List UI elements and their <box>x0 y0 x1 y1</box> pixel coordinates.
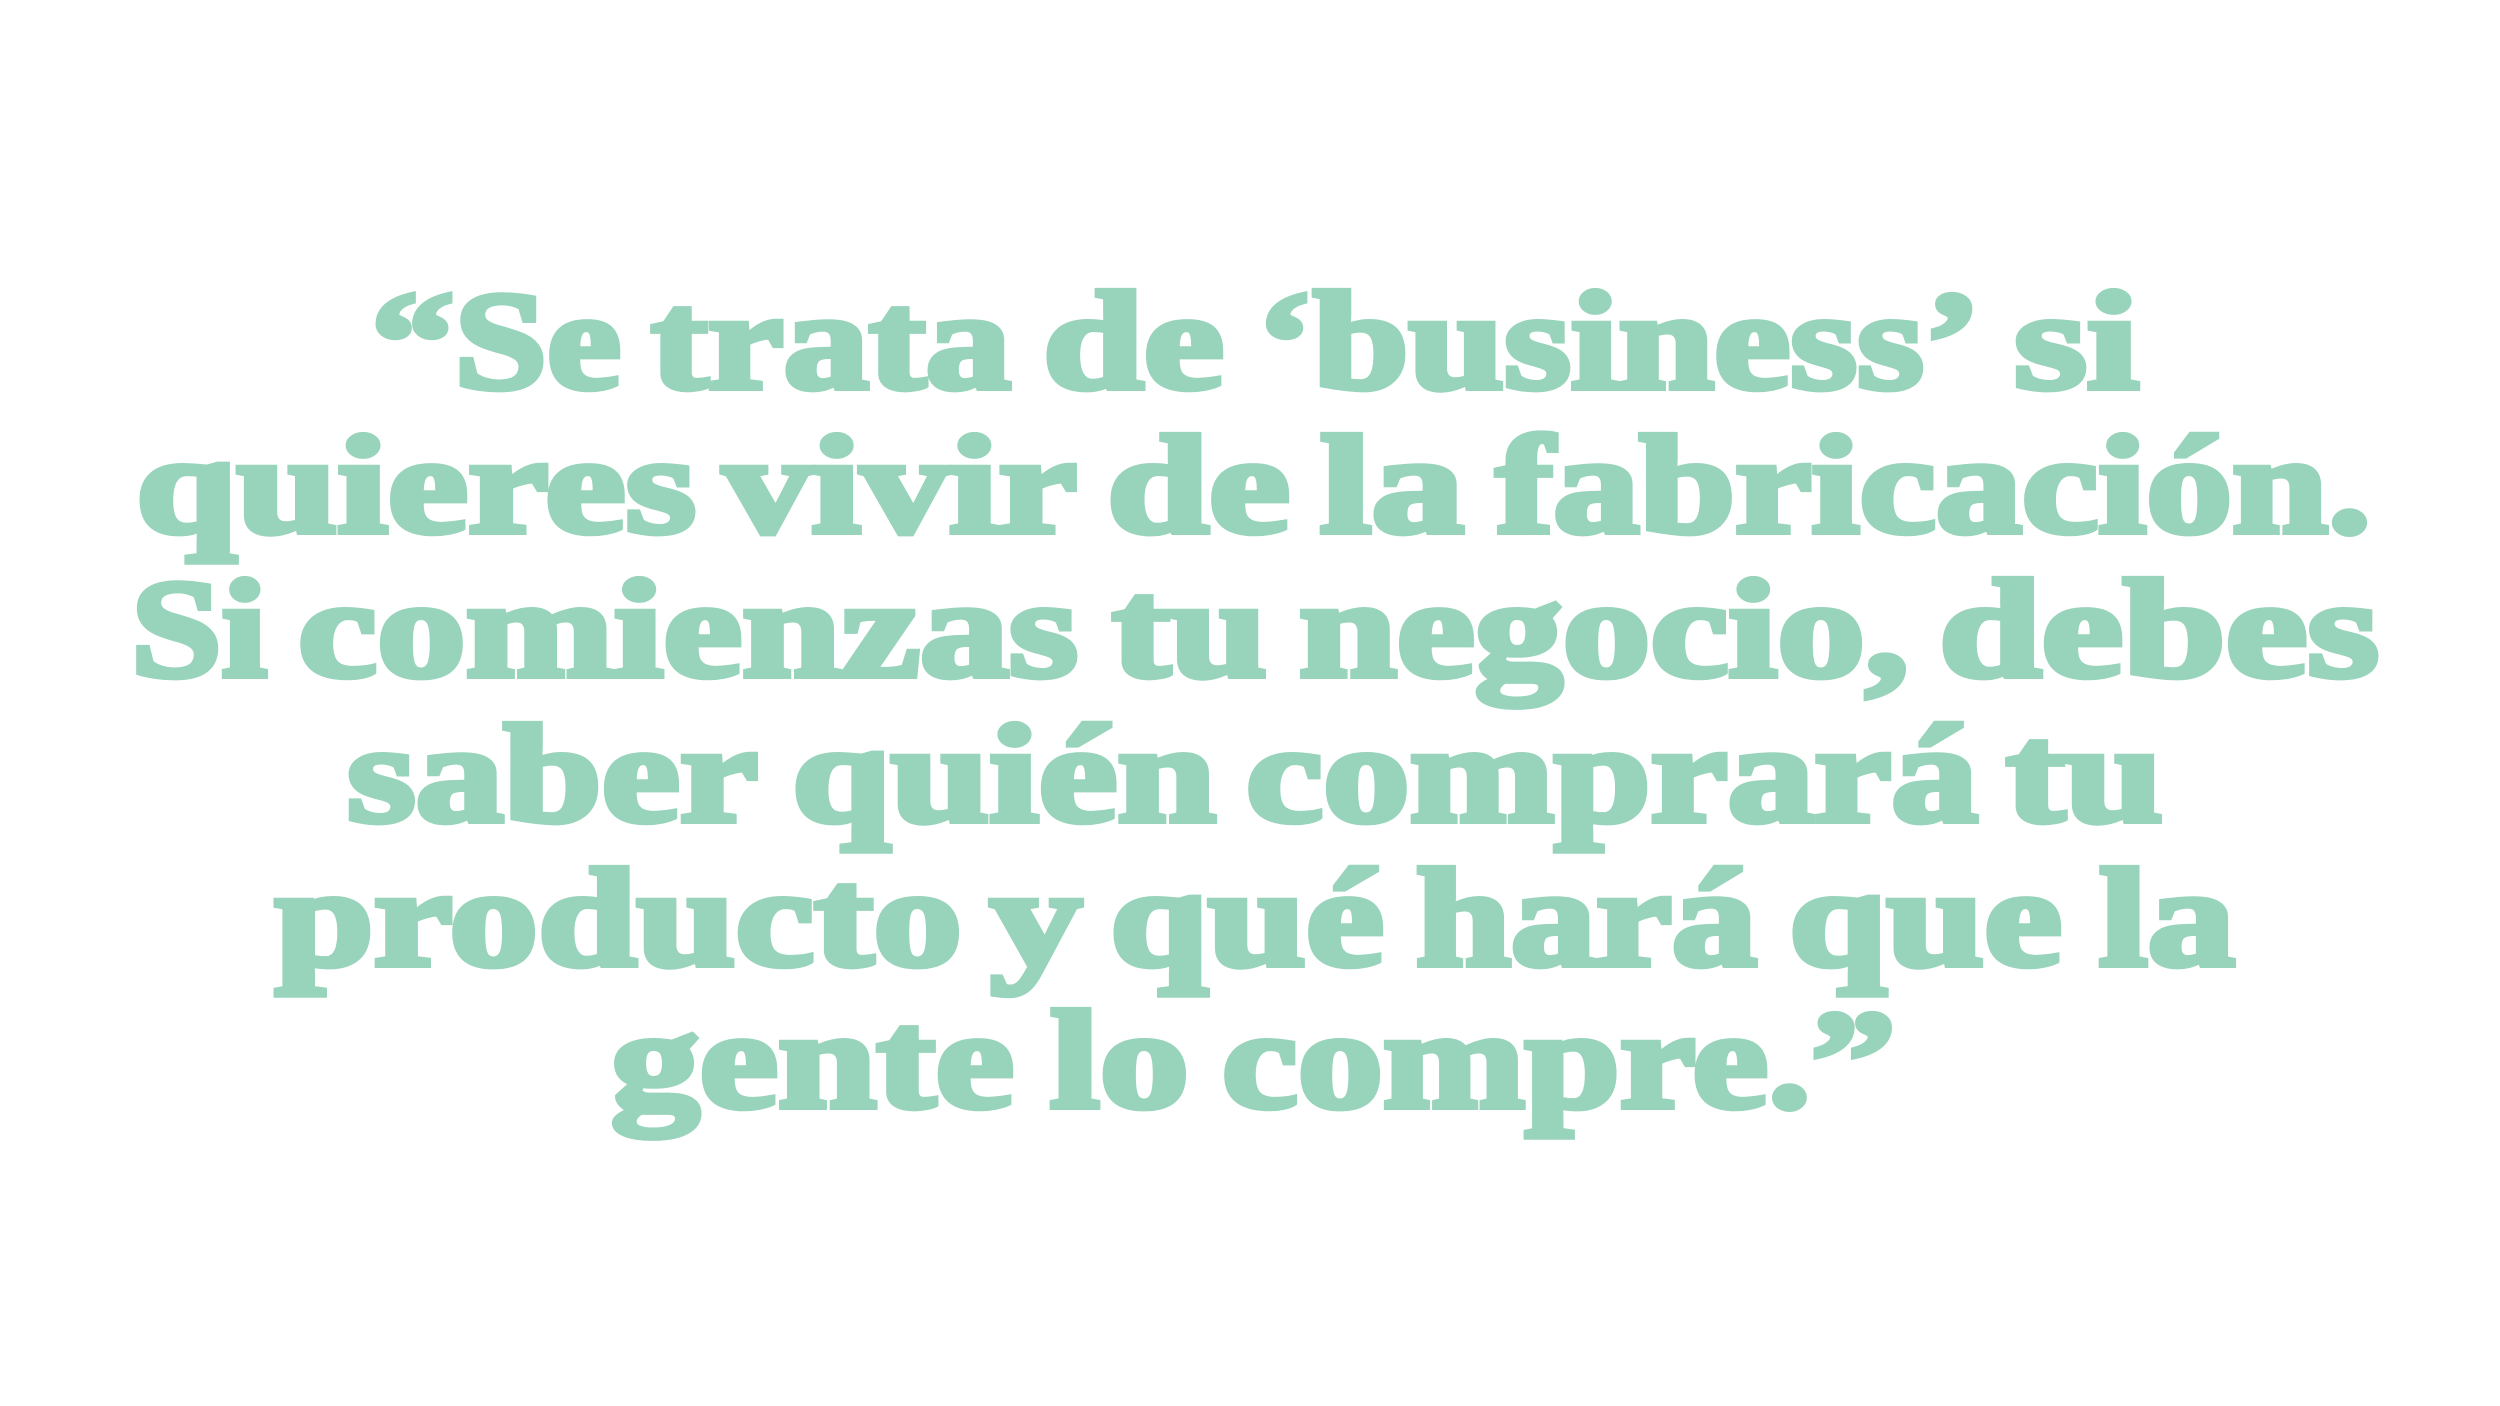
quote line 3: comienzas <box>298 552 1078 707</box>
quote line 4 <box>347 697 2163 852</box>
quote line 3: tu <box>1112 552 1267 707</box>
quote line 1: ‘business’ <box>1256 264 1981 419</box>
quote line 2 <box>136 408 2371 563</box>
quote line 5: qué <box>1110 841 1384 996</box>
quote line 4: tu <box>2006 697 2163 852</box>
quote line 5: la <box>2099 841 2235 996</box>
quote line 1: trata <box>651 264 1011 419</box>
quote line 2: la <box>1320 408 1464 563</box>
quote line 2: vivir <box>723 408 1077 563</box>
quote line 5: producto <box>275 841 962 996</box>
quote line 5: y <box>990 841 1082 996</box>
quote line 1: de <box>1043 264 1224 419</box>
quote line 2: fabricación. <box>1496 408 2371 563</box>
quote line 5: hará <box>1416 841 1757 996</box>
quote line 6: gente <box>611 983 1014 1138</box>
quote line 1 <box>371 264 2139 419</box>
quote line 3: Si <box>131 552 267 707</box>
quote line 4: comprará <box>1246 697 1978 852</box>
quote line 5: que <box>1789 841 2062 996</box>
quote line 4: saber <box>347 697 758 852</box>
quote line 3: debes <box>1939 552 2379 707</box>
quote line 3 <box>131 552 2379 707</box>
quote line 1: si <box>2014 264 2139 419</box>
quote line 1: “Se <box>371 264 621 419</box>
quote line 4: quién <box>792 697 1216 852</box>
quote line 3: negocio, <box>1299 552 1909 707</box>
quote line 6: lo <box>1050 983 1189 1138</box>
quote line 2: de <box>1107 408 1290 563</box>
quote line 6: compre.” <box>1222 983 1896 1138</box>
quote line 2: quieres <box>136 408 696 563</box>
quote line 6 <box>611 983 1896 1138</box>
quote line 5 <box>275 841 2235 996</box>
